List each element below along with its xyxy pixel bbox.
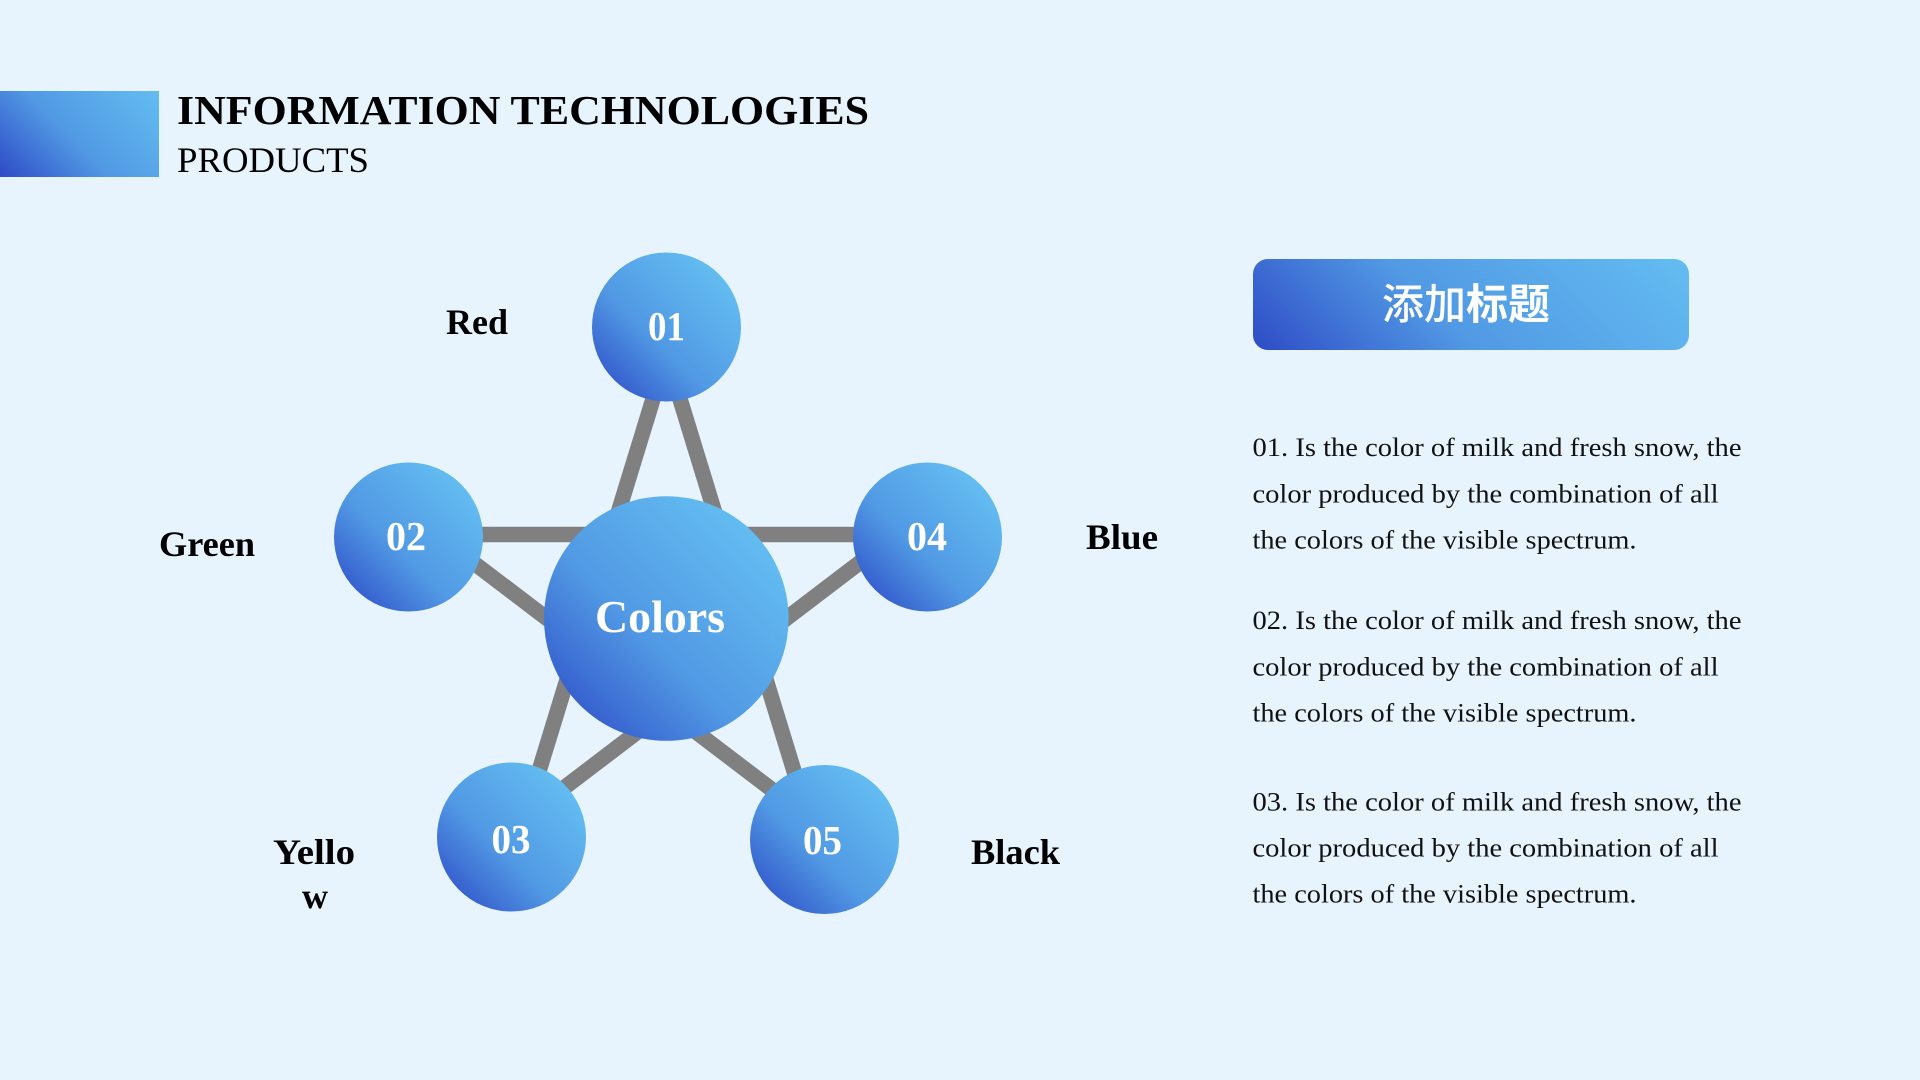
text block 01 xyxy=(1252,433,1742,554)
label: Blue: Blue xyxy=(1086,517,1158,557)
node 05 xyxy=(750,765,899,914)
node 02 xyxy=(334,462,483,612)
label: Black: Black xyxy=(971,832,1060,872)
node 03 xyxy=(437,762,586,912)
center node: Colors: Colors xyxy=(595,591,725,642)
text block 02 xyxy=(1252,606,1742,728)
star diagram xyxy=(334,252,1002,914)
text block 01: the colors of the visible spectrum. xyxy=(1252,526,1636,554)
text block 02: the colors of the visible spectrum. xyxy=(1252,698,1636,728)
node 03: 03 xyxy=(492,816,530,862)
node 04: 04 xyxy=(907,513,947,559)
text block 01: 01. Is the color of milk and fresh snow, the xyxy=(1252,433,1742,462)
text block 03 xyxy=(1252,788,1742,908)
heading button: 添加标题 xyxy=(1382,281,1550,328)
center node: Colors xyxy=(544,496,789,741)
text block 03: 03. Is the color of milk and fresh snow, the xyxy=(1252,788,1742,816)
label: Green: Green xyxy=(159,524,255,564)
text block 03: color produced by the combination of all xyxy=(1252,834,1718,862)
title: INFORMATION TECHNOLOGIES xyxy=(177,87,869,133)
label: Red: Red xyxy=(446,302,508,342)
subtitle: PRODUCTS xyxy=(177,140,369,180)
node 04 xyxy=(853,462,1002,612)
label: Yellow: Yello xyxy=(273,832,355,872)
node 01 xyxy=(592,252,741,402)
header accent block xyxy=(0,91,159,177)
text block 02: 02. Is the color of milk and fresh snow, the xyxy=(1252,606,1742,635)
label: Yellow xyxy=(273,832,355,916)
heading button xyxy=(1253,259,1689,350)
label: Yellow: w xyxy=(302,876,328,916)
node 02: 02 xyxy=(386,513,426,559)
node 01: 01 xyxy=(648,303,685,349)
text block 02: color produced by the combination of all xyxy=(1252,652,1718,682)
star connector lines xyxy=(408,355,927,830)
text block 01: color produced by the combination of all xyxy=(1252,480,1718,508)
node 05: 05 xyxy=(803,817,842,863)
text block 03: the colors of the visible spectrum. xyxy=(1252,880,1636,908)
